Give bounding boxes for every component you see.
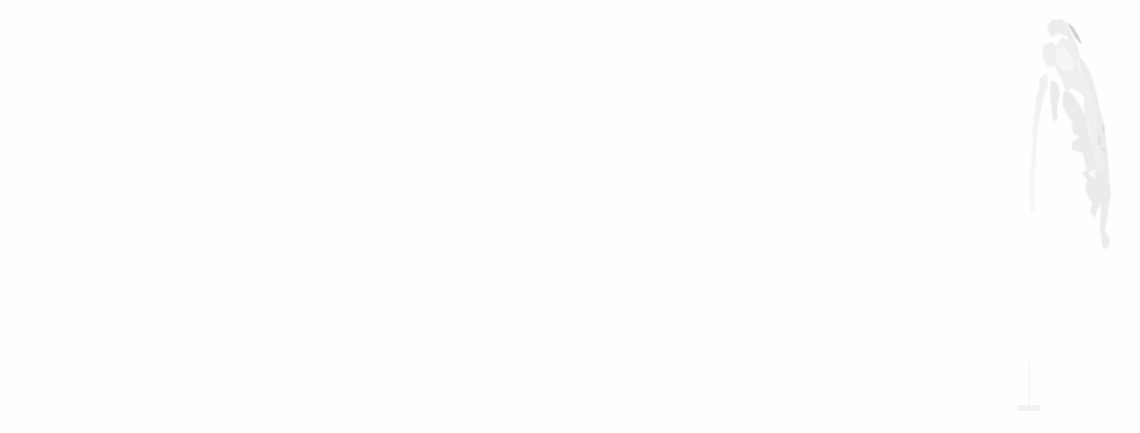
icon: fountain water plume — [1030, 19, 1111, 249]
side water ribbon — [1084, 96, 1104, 172]
upper water crest — [1047, 19, 1080, 60]
inner upper water folds — [1043, 37, 1098, 128]
icon: fountain stem and base — [1017, 361, 1040, 411]
middle falling water mass — [1063, 90, 1098, 172]
lower falling water mass — [1082, 170, 1111, 218]
right outer water edge — [1078, 55, 1111, 249]
highlight in lower falling water — [1092, 170, 1096, 178]
left thin water stream — [1030, 72, 1048, 212]
shaded folds on right side — [1098, 123, 1105, 151]
inner highlight — [1056, 46, 1074, 72]
fountain base — [1017, 405, 1040, 411]
fountain stem — [1028, 361, 1030, 405]
central water streak — [1050, 80, 1060, 122]
darker shaded edge of plume — [1067, 22, 1082, 44]
